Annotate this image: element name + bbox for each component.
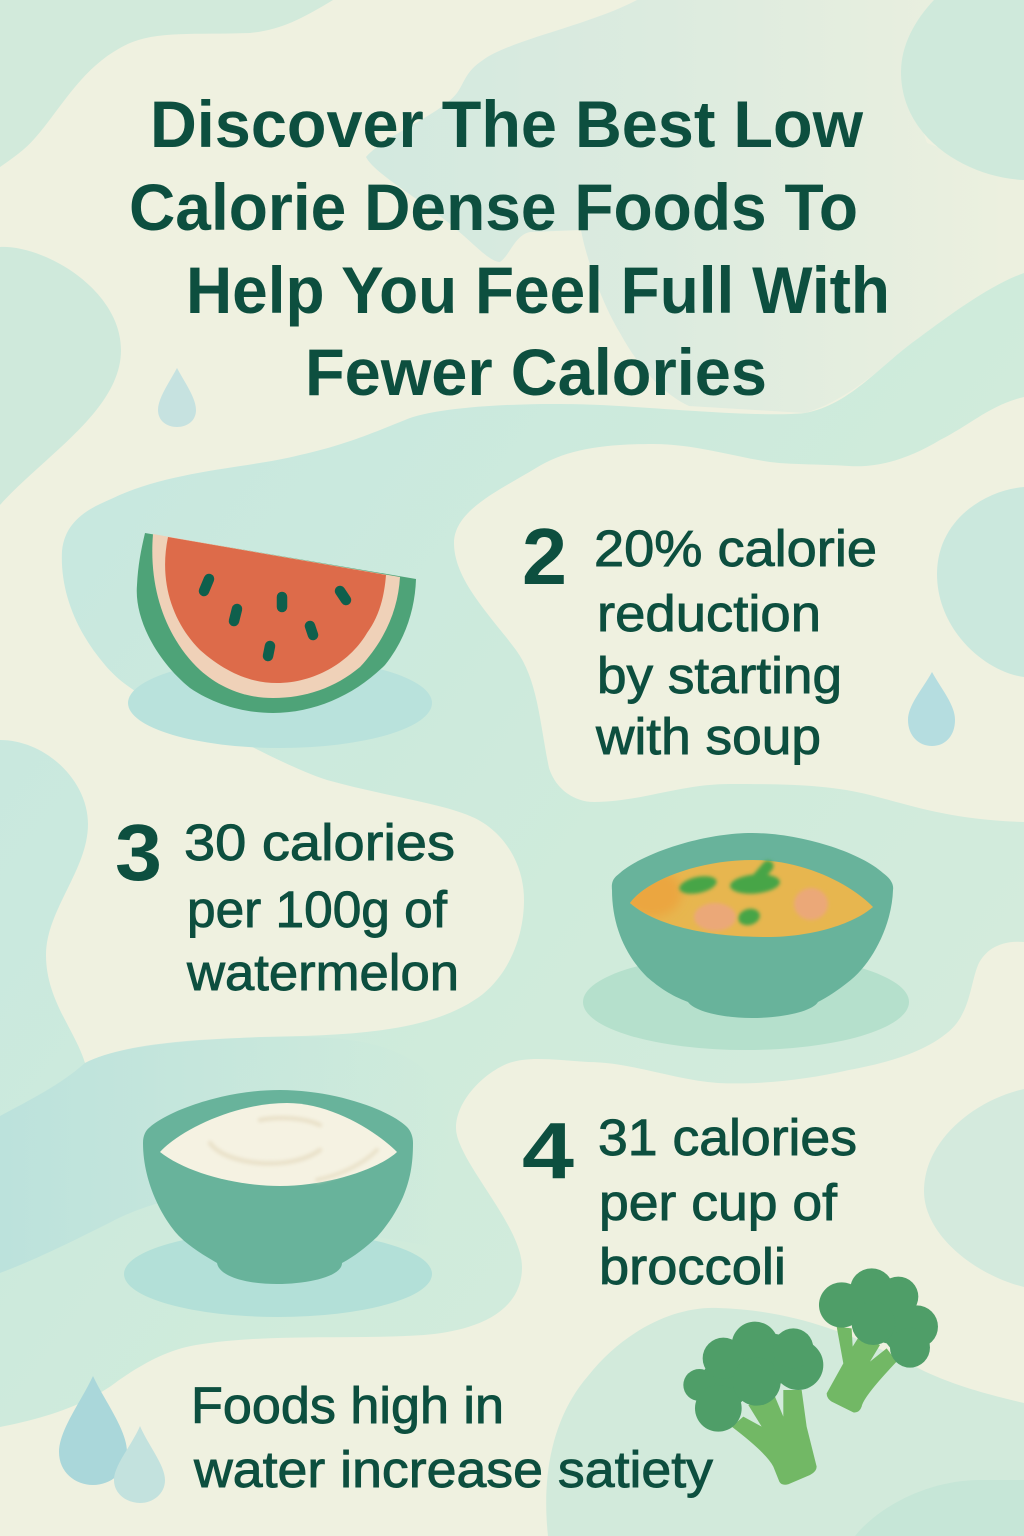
icon: yogurt bowl — [124, 1090, 432, 1317]
title — [129, 87, 890, 409]
stat 3: watermelon calories — [115, 808, 459, 1001]
closing statement: Foods high in — [191, 1377, 504, 1434]
stat 2: soup calorie reduction: with soup — [595, 708, 821, 765]
closing statement: water increase satiety — [193, 1441, 714, 1498]
stat 4: broccoli calories: 4 — [522, 1106, 575, 1195]
stat 4: broccoli calories: 31 calories — [598, 1109, 857, 1166]
icon: watermelon slice — [128, 533, 432, 748]
stat 3: watermelon calories: watermelon — [186, 944, 459, 1001]
stat 3: watermelon calories: per 100g of — [187, 881, 448, 938]
closing statement — [191, 1377, 714, 1498]
title: Fewer Calories — [305, 335, 767, 409]
stat 3: watermelon calories: 30 calories — [184, 814, 455, 871]
stat 4: broccoli calories: per cup of — [599, 1174, 838, 1231]
icon: soup bowl — [583, 833, 909, 1050]
title: Discover The Best Low — [150, 87, 864, 161]
stat 3: watermelon calories: 3 — [115, 808, 162, 897]
stat 2: soup calorie reduction: 20% calorie — [594, 520, 877, 577]
icon: broccoli — [683, 1268, 938, 1485]
stat 2: soup calorie reduction: by starting — [597, 647, 842, 704]
stat 2: soup calorie reduction — [522, 512, 877, 765]
icon: water drop right — [908, 672, 955, 746]
stat 4: broccoli calories: broccoli — [599, 1238, 786, 1295]
title: Help You Feel Full With — [186, 253, 890, 327]
icon: water drop top left — [158, 368, 196, 427]
icon: water drops — [59, 1376, 165, 1503]
stat 4: broccoli calories — [522, 1106, 857, 1295]
title: Calorie Dense Foods To — [129, 170, 858, 244]
stat 2: soup calorie reduction: 2 — [522, 512, 567, 601]
stat 2: soup calorie reduction: reduction — [597, 585, 821, 642]
